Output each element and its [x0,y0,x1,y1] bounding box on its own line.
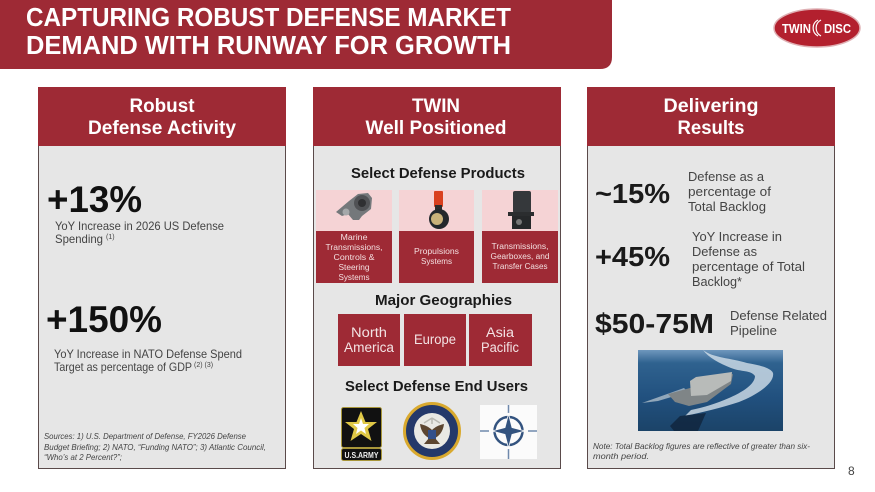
logo: US Navy [404,404,460,458]
stat: +13%: YoY Increase in 2026 US Defense [55,219,224,233]
panel header [587,87,835,146]
product card: propulsion systems: Propulsions [414,247,459,256]
logo: US Army [342,408,382,460]
stat: +13%: +13% [47,179,142,220]
title banner: DEMAND WITH RUNWAY FOR GROWTH [26,32,511,60]
stat: +45%: Defense as [692,245,757,259]
stat: +45%: +45% [595,241,670,272]
sources note [44,431,266,462]
tile: Europe: Europe [414,332,456,347]
tile: Asia Pacific: Pacific [481,340,519,355]
tile: North America [338,314,400,366]
icon: transmission [336,193,372,220]
product card: marine transmissions: Marine [340,233,368,242]
logo: Twin Disc [774,9,860,47]
logo: NATO [480,405,537,459]
stat: $50-75M: $50-75M [595,308,714,339]
product card: propulsion systems [399,190,474,283]
tile: Asia Pacific: Asia [486,325,515,340]
title banner: CAPTURING ROBUST DEFENSE MARKET [26,4,511,32]
icon: gearbox [508,191,534,229]
note [593,441,810,461]
product card: transmissions and gearboxes: Gearboxes, and [490,252,550,261]
sources note: Sources: 1) U.S. Department of Defense, FY2026 Defense [44,431,246,441]
stat: +45%: YoY Increase in [692,230,782,244]
product card: propulsion systems: Systems [421,257,452,266]
panel header: Robust [130,96,195,117]
product card: marine transmissions: Steering [338,263,370,272]
panel header: Defense Activity [88,118,236,139]
product card: marine transmissions: Controls & [334,253,375,262]
icon: propulsor [429,191,449,229]
note: month period. [593,451,649,461]
stat: +13%: Spending [55,232,103,246]
logo: Twin Disc: TWIN [782,21,811,36]
heading: Select Defense End Users: Select Defense End Users [345,378,528,395]
product card: transmissions and gearboxes [482,190,558,283]
product card: marine transmissions [316,190,392,283]
stat: +150%: Target as percentage of GDP [54,360,192,374]
tile: North America: America [344,340,394,355]
stat: ~15% [595,170,772,214]
stat: +150%: +150% [46,299,162,340]
panel header: Well Positioned [366,118,506,139]
stat: ~15%: percentage of [688,185,772,199]
panel header [38,87,286,146]
image: naval vessel at sea [638,350,783,431]
product card: transmissions and gearboxes: Transfer Cases [492,262,548,271]
stat: $50-75M: Pipeline [730,324,777,338]
panel: TWIN Well Positioned [313,87,561,468]
tile: Europe [404,314,466,366]
stat: $50-75M [595,308,827,339]
stat: +150%: YoY Increase in NATO Defense Spend [54,347,242,361]
stat: +150% [46,299,242,374]
panel header: Delivering [664,96,758,117]
sources note: Budget Briefing; 2) NATO, “Funding NATO”; 3) Atlantic Council, [44,442,266,452]
stat: ~15%: Defense as a [688,170,764,184]
heading: Select Defense Products: Select Defense Products [351,165,525,182]
sources note: “Who’s at 2 Percent?”; [44,452,123,462]
logo: US Army: U.S.ARMY [344,451,379,460]
note: Note: Total Backlog figures are reflective of greater than six- [593,441,810,451]
product card: marine transmissions: Systems [338,273,370,282]
heading: Major Geographies: Major Geographies [375,292,512,309]
page number: 8 [848,464,855,478]
panel header: TWIN [412,96,460,117]
stat: +45%: percentage of Total [692,260,805,274]
stat: +45%: Backlog* [692,275,742,289]
stat: +150%: (2) (3) [194,362,213,369]
stat: +13% [47,179,224,246]
stat: $50-75M: Defense Related [730,309,827,323]
tile: North America: North [351,325,387,340]
stat: ~15%: Total Backlog [688,200,766,214]
stat: +45% [595,230,805,289]
panel header [313,87,561,146]
product card: transmissions and gearboxes: Transmissions, [492,242,548,251]
stat: +13%: (1) [106,234,115,241]
tile: Asia Pacific [469,314,532,366]
stat: ~15%: ~15% [595,178,670,209]
panel header: Results [678,118,744,139]
panel: Delivering Results [587,87,835,468]
title banner [0,0,612,69]
logo: Twin Disc: DISC [824,21,852,36]
panel: Robust Defense Activity [38,87,286,468]
product card: marine transmissions: Transmissions, [326,243,382,252]
